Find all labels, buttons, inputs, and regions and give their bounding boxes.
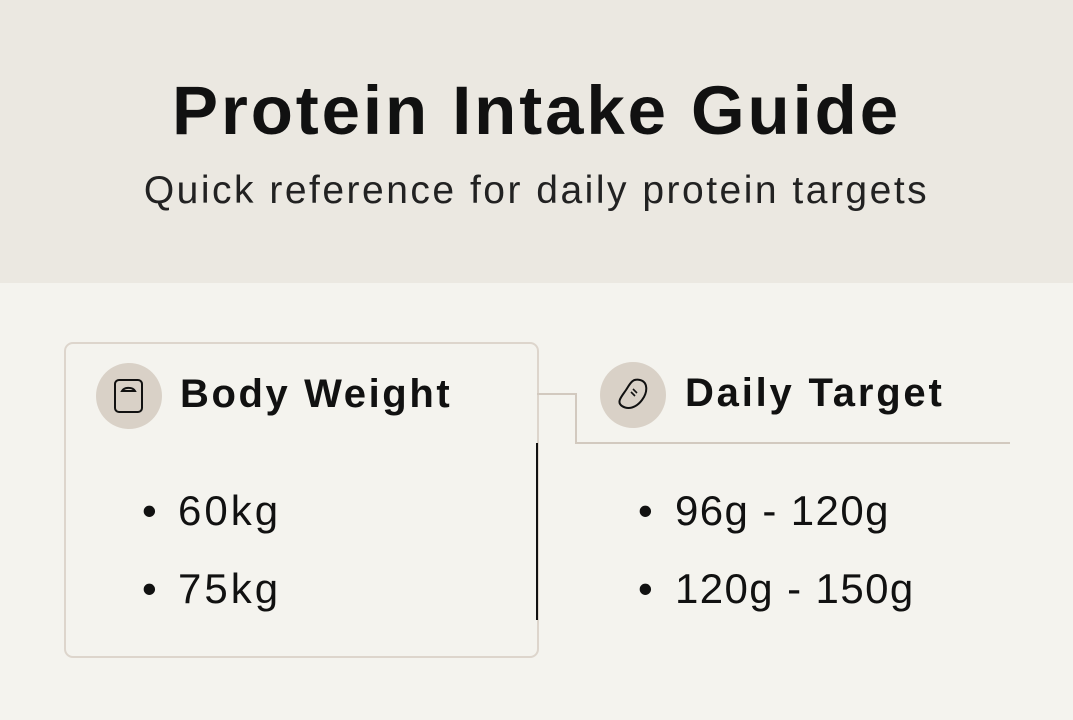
list: weights: 75kg xyxy=(178,565,281,612)
subtitle: Quick reference for daily protein targets xyxy=(144,169,929,212)
heading: body weight: Body Weight xyxy=(180,372,452,416)
panel: daily target xyxy=(600,362,945,612)
connector arrow xyxy=(537,393,1010,444)
icon: steak xyxy=(600,362,666,428)
list: weights: 60kg xyxy=(178,487,281,534)
list: weights: • xyxy=(142,565,157,612)
list: targets: 120g - 150g xyxy=(675,565,915,612)
list: weights: • xyxy=(142,487,157,534)
list: weights xyxy=(142,487,281,612)
list: targets: • xyxy=(638,487,653,534)
title: Protein Intake Guide xyxy=(172,72,901,149)
list: targets: 96g - 120g xyxy=(675,487,890,534)
icon: scale xyxy=(96,363,162,429)
divider line xyxy=(536,443,538,620)
panel: body weight xyxy=(64,342,539,658)
list: targets xyxy=(638,487,915,612)
header band xyxy=(0,0,1073,283)
list: targets: • xyxy=(638,565,653,612)
heading: daily target: Daily Target xyxy=(685,371,945,415)
